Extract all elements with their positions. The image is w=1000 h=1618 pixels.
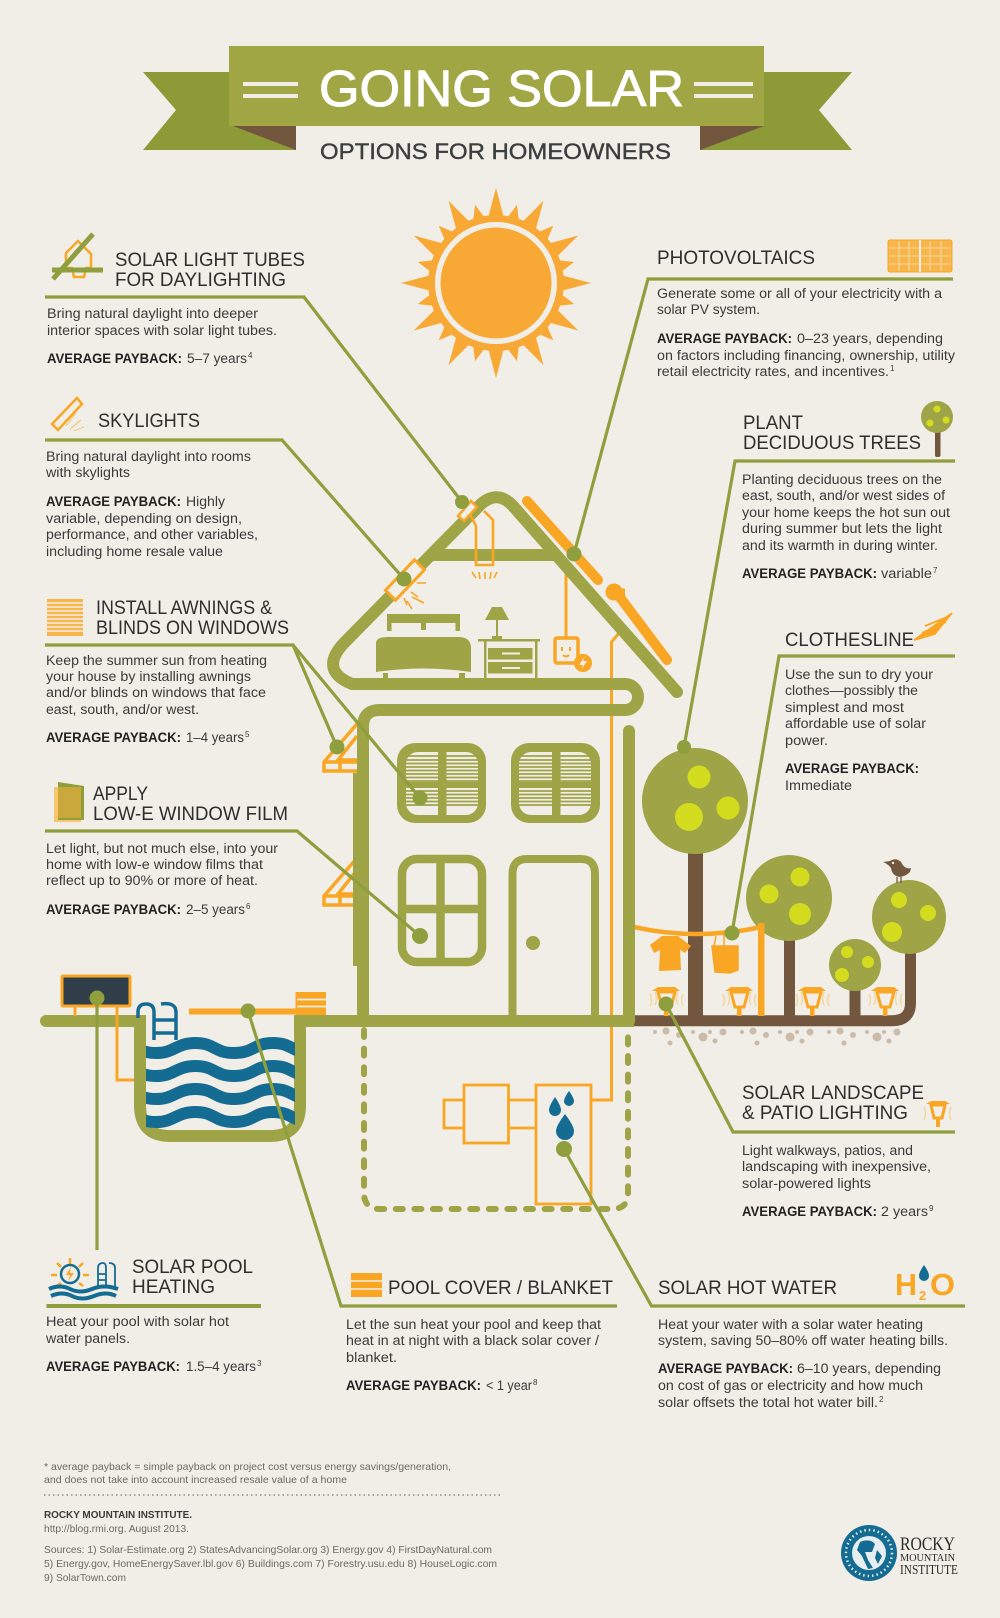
panel: skylights (45, 398, 258, 559)
body text (46, 841, 279, 888)
body text: system, saving 50–80% off water heating bills. (658, 1333, 948, 1348)
payback: 0–23 years, depending (797, 331, 943, 346)
line (634, 927, 762, 934)
bed (376, 614, 471, 679)
heading: PHOTOVOLTAICS (657, 247, 815, 269)
body text (45, 449, 251, 480)
payback (47, 351, 253, 366)
payback: 8 (533, 1378, 538, 1387)
payback: AVERAGE PAYBACK: (346, 1378, 481, 1393)
body text: heat in at night with a black solar cover / (346, 1333, 599, 1348)
payback: 2–5 years (186, 902, 245, 917)
wire to outlet (564, 573, 568, 638)
light 2 (723, 987, 756, 1016)
brown ground and trunks (634, 935, 910, 1021)
body text (742, 1143, 931, 1191)
payback: performance, and other variables, (46, 527, 258, 542)
leader: photovoltaics (566, 279, 953, 562)
payback: retail electricity rates, and incentives. (657, 364, 889, 379)
payback: on cost of gas or electricity and how much (658, 1378, 923, 1393)
payback: 1–4 years (186, 730, 244, 745)
title banner (143, 46, 852, 150)
nightstand (478, 639, 540, 679)
upper roof panel (527, 501, 598, 580)
credits and sources: http://blog.rmi.org. August 2013. (44, 1523, 189, 1535)
banner right bars (694, 84, 753, 96)
banner right tail (700, 72, 852, 150)
main trunk (688, 850, 703, 1020)
left wall strip (353, 773, 358, 966)
outlet icon (555, 638, 592, 672)
payback (657, 331, 955, 379)
icon: H2O: 2 (919, 1288, 926, 1303)
panel: photovoltaics (657, 240, 955, 379)
body text: interior spaces with solar light tubes. (47, 323, 277, 338)
logo: Rocky Mountain Institute (841, 1525, 958, 1581)
pool water waves (146, 1037, 295, 1128)
large tree (642, 748, 748, 854)
leader: deciduous trees (677, 461, 955, 754)
heading: DECIDUOUS TREES (743, 432, 921, 454)
payback: 9 (929, 1204, 934, 1213)
panel: awnings and blinds (46, 597, 289, 745)
heading: PLANT (743, 412, 803, 434)
payback: solar offsets the total hot water bill. (658, 1395, 878, 1410)
payback: variable, depending on design, (46, 511, 242, 526)
garden lights (650, 987, 902, 1016)
right tree (872, 880, 946, 954)
payback (46, 902, 251, 917)
heading: CLOTHESLINE (785, 629, 914, 651)
heading: APPLY (93, 783, 148, 805)
panel: clothesline (785, 613, 952, 793)
icon: pool heating (49, 1258, 118, 1298)
payback (46, 494, 258, 559)
icon: garden light (924, 1101, 951, 1127)
sun (401, 188, 591, 378)
heading: FOR DAYLIGHTING (115, 269, 286, 291)
nightstand and lamp (478, 607, 540, 679)
body text: Light walkways, patios, and (742, 1143, 913, 1158)
leader: awnings and blinds (45, 645, 428, 806)
wire to water tank (591, 633, 619, 1100)
body text (47, 306, 277, 338)
heading: HEATING (132, 1276, 215, 1298)
body text (742, 472, 950, 553)
heading (93, 783, 288, 825)
heading: SOLAR HOT WATER (658, 1277, 837, 1299)
footnote: and does not take into account increased resale value of a home (44, 1474, 347, 1486)
payback (658, 1361, 941, 1410)
awnings (324, 724, 357, 905)
panel (62, 976, 130, 1006)
small tree (829, 939, 881, 991)
solar hot water system (444, 1085, 591, 1204)
payback: AVERAGE PAYBACK: (742, 1204, 877, 1219)
payback: AVERAGE PAYBACK: (46, 1359, 180, 1374)
payback: 2 years (881, 1204, 928, 1219)
payback: 2 (879, 1395, 884, 1404)
attic beam (430, 549, 556, 561)
payback: variable (881, 566, 932, 581)
payback: 6 (246, 902, 251, 911)
body text: east, south, and/or west sides of (742, 488, 945, 503)
leader: landscape lighting (658, 996, 955, 1132)
bucket garment (712, 934, 738, 973)
payback: AVERAGE PAYBACK: (657, 331, 792, 346)
payback: 1.5–4 years (186, 1359, 256, 1374)
water drops (549, 1091, 574, 1140)
wordmark: ROCKY (900, 1534, 955, 1555)
body text (785, 667, 934, 748)
panel: solar light tubes (47, 234, 305, 366)
payback: 5–7 years (187, 351, 247, 366)
garden trees (634, 748, 946, 1021)
light 3 (796, 987, 829, 1016)
body text: during summer but lets the light (742, 521, 942, 536)
body text: reflect up to 90% or more of heat. (46, 873, 258, 888)
pole (758, 923, 764, 1016)
light 1 (650, 987, 683, 1016)
body text: solar PV system. (657, 302, 760, 317)
pool solar heating panel (62, 976, 134, 1080)
heading: & PATIO LIGHTING (742, 1102, 908, 1124)
wordmark: INSTITUTE (900, 1563, 958, 1578)
upper right window with blinds (511, 743, 600, 823)
body text: Heat your pool with solar hot (46, 1314, 229, 1329)
banner main (229, 46, 764, 126)
credits and sources: Sources: 1) Solar-Estimate.org 2) StatesAdvancingSolar.org 3) Energy.gov 4) FirstDayNatural.com (44, 1544, 492, 1556)
upper left window with blinds (397, 743, 486, 823)
dashed basement (364, 1030, 628, 1209)
lamp (485, 607, 509, 639)
house structure (44, 497, 677, 1136)
upper awning (324, 724, 357, 771)
panel legs and pipe (75, 1007, 134, 1080)
panel: solar pool heating (45, 1256, 262, 1374)
lower awning (324, 858, 357, 905)
heading: LOW-E WINDOW FILM (93, 803, 288, 825)
wordmark (900, 1534, 958, 1578)
payback: AVERAGE PAYBACK: (658, 1361, 793, 1376)
icon: pool cover (351, 1273, 382, 1297)
icon: solar panels (888, 240, 952, 272)
pipes (444, 1100, 536, 1128)
payback: AVERAGE PAYBACK: (47, 351, 182, 366)
icon: blinds (47, 599, 83, 636)
right wall (623, 731, 635, 1021)
solar panels and wiring (527, 501, 667, 1100)
roof panel knob (615, 588, 625, 596)
medium tree (746, 855, 832, 941)
credits and sources: 5) Energy.gov, HomeEnergySaver.lbl.gov 6) Buildings.com 7) Forestry.usu.edu 8) HouseLogic.com (44, 1558, 497, 1570)
body text: and/or blinds on windows that face (46, 685, 266, 700)
leader: window film (45, 831, 428, 944)
heading (115, 249, 305, 291)
soil pebbles (653, 1028, 900, 1046)
credits and sources (44, 1509, 497, 1584)
leader: solar light tubes (45, 297, 469, 509)
t-shirt (650, 936, 691, 971)
body text: Heat your water with a solar water heating (658, 1317, 923, 1332)
body text: blanket. (346, 1350, 397, 1365)
light 4 (869, 987, 902, 1016)
water tank (536, 1085, 591, 1204)
panel: solar hot water (658, 1265, 955, 1410)
body text: clothes—possibly the (785, 683, 918, 698)
heading: SOLAR LANDSCAPE (742, 1082, 924, 1104)
body text: power. (785, 733, 828, 748)
heading: SOLAR LIGHT TUBES (115, 249, 305, 271)
title text: GOING SOLAR (319, 60, 684, 117)
payback: AVERAGE PAYBACK: (785, 761, 919, 776)
body text: and its warmth in during winter. (742, 538, 938, 553)
icon: H2O: H (895, 1267, 917, 1302)
body text (657, 286, 943, 317)
ground left cap (44, 1018, 48, 1024)
left collector box (464, 1085, 508, 1143)
lower roof panel (616, 592, 667, 660)
icon: H2O (895, 1265, 955, 1303)
payback: AVERAGE PAYBACK: (742, 566, 877, 581)
icon: H2O: O (930, 1267, 955, 1302)
payback: 6–10 years, depending (797, 1361, 941, 1376)
body text (45, 1314, 229, 1346)
banner right fold (700, 126, 764, 150)
icon: tree (921, 401, 953, 457)
body text: Let light, but not much else, into your (46, 841, 279, 856)
payback: AVERAGE PAYBACK: (46, 494, 181, 509)
heading: BLINDS ON WINDOWS (96, 617, 289, 639)
leader: solar hot water (556, 1141, 965, 1306)
payback: 3 (257, 1359, 262, 1368)
body text: east, south, and/or west. (46, 702, 199, 717)
credits and sources: 9) SolarTown.com (44, 1572, 126, 1584)
body text: Let the sun heat your pool and keep that (346, 1317, 601, 1332)
body text (346, 1317, 601, 1365)
payback: AVERAGE PAYBACK: (46, 902, 181, 917)
payback: 1 (890, 364, 895, 373)
panel: deciduous trees (742, 401, 953, 581)
heading: INSTALL AWNINGS & (96, 597, 272, 619)
knob circle (606, 584, 622, 600)
payback: 7 (933, 566, 938, 575)
body text (46, 653, 267, 717)
body text: your house by installing awnings (46, 669, 251, 684)
body text: Planting deciduous trees on the (742, 472, 942, 487)
leader: pool heating (90, 990, 104, 1250)
banner left fold (233, 126, 296, 150)
heading (96, 597, 289, 639)
body text: simplest and most (785, 700, 904, 715)
icon: skylight (52, 398, 84, 431)
payback: 4 (248, 351, 253, 360)
panel: low-e window film (46, 782, 288, 917)
body text: home with low-e window films that (46, 857, 263, 872)
body text: Bring natural daylight into rooms (46, 449, 251, 464)
wordmark: MOUNTAIN (900, 1553, 955, 1564)
leader: skylights (45, 440, 412, 586)
panel: solar landscape and patio lighting (742, 1082, 951, 1219)
footnote (44, 1461, 501, 1495)
banner left bars (243, 84, 298, 96)
payback: < 1 year (486, 1378, 532, 1393)
body text: Generate some or all of your electricity with a (657, 286, 943, 301)
body text: landscaping with inexpensive, (742, 1159, 931, 1174)
payback: AVERAGE PAYBACK: (46, 730, 181, 745)
front door (512, 859, 595, 1018)
skylight on roof (386, 560, 426, 609)
payback: 5 (245, 730, 250, 739)
bird (883, 859, 911, 883)
light tube in attic (458, 501, 497, 579)
footnote: * average payback = simple payback on project cost versus energy savings/generation, (44, 1461, 451, 1473)
heading (743, 412, 921, 454)
ground and pool outline (46, 1021, 634, 1136)
banner left tail (143, 72, 296, 150)
lower window (402, 859, 482, 962)
pool ladder (138, 1004, 176, 1040)
credits and sources: ROCKY MOUNTAIN INSTITUTE. (44, 1509, 192, 1521)
pool cover (189, 992, 326, 1015)
icon: solar tube house (52, 234, 103, 279)
payback (785, 761, 919, 793)
heading: SOLAR POOL (132, 1256, 253, 1278)
heading: POOL COVER / BLANKET (388, 1277, 613, 1299)
payback (46, 730, 250, 745)
payback: Highly (186, 494, 225, 509)
icon: clothespin (914, 613, 952, 640)
body text: water panels. (45, 1331, 130, 1346)
payback: Immediate (785, 778, 852, 793)
payback: on factors including financing, ownership, utility (657, 348, 955, 363)
heading (132, 1256, 253, 1298)
payback (46, 1359, 262, 1374)
body text: solar-powered lights (742, 1176, 871, 1191)
panel: pool cover (346, 1273, 613, 1393)
body text: affordable use of solar (785, 716, 927, 731)
subtitle: OPTIONS FOR HOMEOWNERS (320, 139, 671, 164)
body text: with skylights (45, 465, 130, 480)
body text: your home keeps the hot sun out (742, 505, 950, 520)
body text: Keep the summer sun from heating (46, 653, 267, 668)
body text: Bring natural daylight into deeper (47, 306, 259, 321)
clothesline (634, 923, 764, 1016)
heading: SKYLIGHTS (98, 410, 200, 432)
icon: window film (54, 782, 84, 822)
leader: pool cover (240, 1004, 617, 1306)
roof and upper wall outline (333, 497, 677, 1021)
payback: including home resale value (46, 544, 223, 559)
body text (658, 1317, 948, 1348)
globe (841, 1525, 897, 1581)
heading rule (46, 1304, 261, 1308)
body text: Use the sun to dry your (785, 667, 934, 682)
leader: clothesline (724, 656, 955, 940)
heading (742, 1082, 924, 1124)
